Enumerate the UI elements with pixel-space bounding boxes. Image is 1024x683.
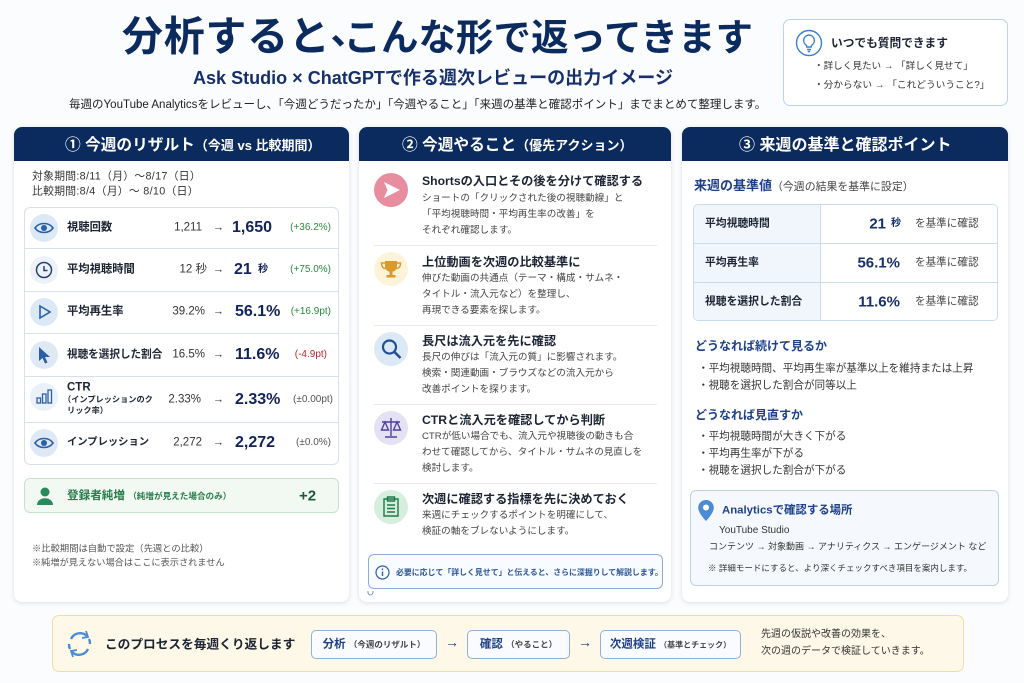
action 4	[422, 413, 642, 474]
panel header: ② 今週やること（優先アクション）	[402, 137, 633, 154]
icon: light bulb	[796, 30, 822, 56]
text: 視聴を選択した割合	[705, 296, 802, 308]
metric: views	[24, 208, 339, 248]
text: 2,272	[173, 436, 202, 448]
text: 56.1%	[857, 254, 900, 272]
text: →	[213, 348, 224, 360]
callout: ask for details	[368, 554, 663, 589]
box heading: Analyticsで確認する場所	[722, 504, 852, 516]
baseline: selected rate	[705, 292, 985, 312]
text: 11.6%	[235, 346, 279, 363]
icon: play	[30, 298, 58, 326]
process heading: このプロセスを毎週くり返します	[105, 638, 295, 652]
text: 39.2%	[172, 305, 205, 317]
text: を基準に確認	[915, 218, 979, 230]
action 4: CTRが低い場合でも、流入元や視聴後の動きも合	[422, 431, 633, 442]
arrow: →	[445, 634, 459, 650]
metric: average view duration	[24, 249, 339, 291]
text: →	[213, 436, 224, 448]
icon: send	[374, 173, 408, 207]
metric: impressions	[24, 423, 339, 465]
panel header	[359, 127, 671, 161]
process description: 先週の仮説や改善の効果を、	[761, 629, 891, 640]
baseline: duration	[705, 214, 985, 234]
metric: selected rate	[24, 334, 339, 376]
action 5: 来週にチェックするポイントを明確にして、	[422, 510, 613, 521]
text: 11.6%	[858, 294, 900, 310]
callout: question tips	[783, 19, 1008, 106]
action 4: CTRと流入元を確認してから判断	[422, 413, 605, 427]
text: (-4.9pt)	[295, 349, 327, 360]
icon: cycle arrows	[68, 630, 92, 658]
continue heading: どうなれば続けて見るか	[695, 339, 827, 353]
action 1: ショートの「クリックされた後の視聴動線」と	[422, 193, 623, 204]
text: (+36.2%)	[290, 222, 331, 233]
icon: scales	[374, 411, 408, 445]
icon: cursor	[30, 341, 58, 369]
subtitle: Ask Studio × ChatGPTで作る週次レビューの出力イメージ	[193, 68, 673, 88]
footnotes: ※比較期間は自動で設定（先週との比較）	[32, 543, 209, 553]
comparison dates	[32, 170, 201, 198]
continue criteria: ・平均視聴時間、平均再生率が基準以上を維持または上昇	[698, 363, 973, 375]
text: 2.33%	[168, 393, 201, 405]
icon: map pin	[698, 500, 714, 521]
text: インプレッション	[67, 437, 149, 448]
text: 平均視聴時間	[705, 218, 770, 230]
footnotes: ※純増が見えない場合はここに表示されません	[32, 557, 225, 567]
callout text: 必要に応じて「詳しく見せて」と伝えると、さらに深掘りして解説します。	[396, 568, 663, 577]
text: 12 秒	[180, 263, 207, 275]
text: →	[213, 264, 224, 276]
icon: bars	[30, 383, 58, 411]
action 3: 長尺の伸びは「流入元の質」に影響されます。	[422, 352, 623, 363]
action 1: 「平均視聴時間・平均再生率の改善」を	[422, 209, 595, 220]
icon: eye	[30, 214, 58, 242]
subscriber gain box	[24, 478, 339, 513]
continue criteria	[698, 362, 973, 392]
review criteria	[698, 430, 846, 477]
text: を基準に確認	[915, 296, 979, 308]
icon: clipboard	[374, 490, 408, 524]
text: 平均再生率	[67, 305, 124, 317]
step: check	[467, 630, 570, 659]
text: (+16.9pt)	[291, 306, 331, 317]
metrics table	[24, 207, 339, 465]
action 3	[422, 334, 623, 395]
box path: YouTube Studio	[719, 525, 789, 536]
text: →	[213, 222, 224, 234]
metric: CTR	[24, 377, 339, 422]
review criteria: ・平均視聴時間が大きく下がる	[698, 431, 846, 443]
action 2: 伸びた動画の共通点（テーマ・構成・サムネ・	[422, 273, 623, 284]
action 3: 検索・関連動画・ブラウズなどの流入元から	[422, 368, 614, 379]
text: 56.1%	[235, 303, 280, 320]
panel: next week	[682, 127, 1008, 602]
step: next verification: 次週検証 （基準とチェック）	[610, 638, 731, 650]
text: (±0.0%)	[296, 437, 331, 448]
text: 1,650	[232, 219, 272, 236]
title: 分析すると こんな形で返ってきます	[122, 13, 753, 59]
icon: info	[375, 565, 390, 580]
bottom process banner	[52, 615, 964, 672]
text: 2.33%	[235, 391, 280, 408]
action 1: Shortsの入口とその後を分けて確認する	[422, 174, 643, 188]
analytics location box: コンテンツ → 対象動画 → アナリティクス → エンゲージメント など	[709, 542, 986, 552]
action 1	[422, 174, 643, 236]
text: 16.5%	[172, 348, 205, 360]
action 2: 上位動画を次週の比較基準に	[422, 255, 580, 269]
step: next verification	[600, 630, 741, 659]
process description: 次の週のデータで検証していきます。	[761, 646, 930, 657]
review heading: どうなれば見直すか	[695, 408, 803, 422]
icon: clock	[30, 256, 58, 284]
text: 平均視聴時間	[67, 263, 135, 275]
tips heading: いつでも質問できます	[831, 37, 948, 50]
panel header	[14, 127, 349, 161]
subscriber label: 登録者純増 （純増が見えた場合のみ）	[67, 489, 231, 502]
panel: results	[14, 127, 349, 602]
action 2: タイトル・流入元など）を整理し、	[422, 289, 576, 300]
step: analysis	[311, 630, 437, 659]
panel header: ① 今週のリザルト（今週 vs 比較期間）	[65, 137, 321, 154]
action 5: 次週に確認する指標を先に決めておく	[422, 492, 629, 506]
arrow: →	[578, 634, 592, 650]
icon: trophy	[374, 252, 408, 286]
icon: person	[37, 488, 53, 505]
panel: actions	[359, 127, 671, 602]
text: 平均再生率	[705, 257, 759, 269]
tip 2: ・分からない → 「これどういうこと?」	[814, 80, 989, 91]
text: 視聴を選択した割合	[67, 349, 162, 361]
action 2	[422, 255, 623, 316]
text: 2,272	[235, 434, 275, 451]
text: 21	[234, 261, 252, 278]
action 1: それぞれ確認します。	[422, 225, 517, 236]
text: リック率）	[67, 406, 108, 415]
panel header: ③ 来週の基準と確認ポイント	[739, 137, 951, 154]
action 5	[422, 492, 629, 537]
action 5: 検証の軸をブレないようにします。	[422, 526, 574, 537]
text: 1,211	[174, 221, 202, 233]
action 2: 再現できる要素を探します。	[422, 305, 546, 316]
subscriber value: +2	[299, 488, 316, 504]
action 3: 長尺は流入元を先に確認	[422, 334, 556, 348]
comparison dates: 比較期間:8/4（月）～ 8/10（日）	[32, 186, 199, 198]
icon: magnifier	[374, 332, 408, 366]
text: 秒	[258, 264, 268, 275]
box note: ※ 詳細モードにすると、より深くチェックすべき項目を案内します。	[708, 563, 972, 573]
process description	[761, 628, 930, 657]
baseline heading: 来週の基準値（今週の結果を基準に設定）	[694, 178, 914, 193]
text: CTR	[67, 381, 91, 393]
text: (±0.00pt)	[293, 394, 333, 405]
footnotes	[32, 543, 225, 567]
icon: eye	[30, 429, 58, 457]
action 3: 改善ポイントを探ります。	[422, 384, 536, 395]
text: →	[213, 394, 224, 406]
text: (+75.0%)	[290, 264, 331, 275]
baseline table	[693, 204, 998, 321]
baseline: retention	[705, 253, 985, 273]
text: を基準に確認	[915, 257, 979, 269]
description: 毎週のYouTube Analyticsをレビューし、「今週どうだったか」「今週やること」「来週の基準と確認ポイント」までまとめて整理します。	[69, 99, 766, 111]
small return mark	[368, 591, 374, 596]
text: 秒	[891, 218, 901, 229]
action 4: わせて確認してから、タイトル・サムネの見直しを	[422, 447, 642, 458]
tip 1: ・詳しく見たい → 「詳しく見せて」	[814, 61, 973, 72]
text: 21	[869, 216, 886, 232]
panel header	[682, 127, 1008, 161]
metric: average retention	[24, 292, 339, 333]
text: 視聴回数	[67, 221, 112, 233]
text: →	[213, 306, 224, 318]
review criteria: ・平均再生率が下がる	[698, 448, 804, 460]
continue criteria: ・視聴を選択した割合が同等以上	[698, 380, 857, 392]
action 4: 検討します。	[422, 463, 479, 474]
analytics location box	[690, 490, 999, 586]
comparison dates: 対象期間:8/11（月）～8/17（日）	[32, 171, 201, 183]
text: （インプレッションのク	[63, 395, 153, 404]
step: analysis: 分析 （今週のリザルト）	[323, 638, 425, 650]
review criteria: ・視聴を選択した割合が下がる	[698, 465, 846, 477]
step: check: 確認 （やること）	[480, 638, 557, 650]
